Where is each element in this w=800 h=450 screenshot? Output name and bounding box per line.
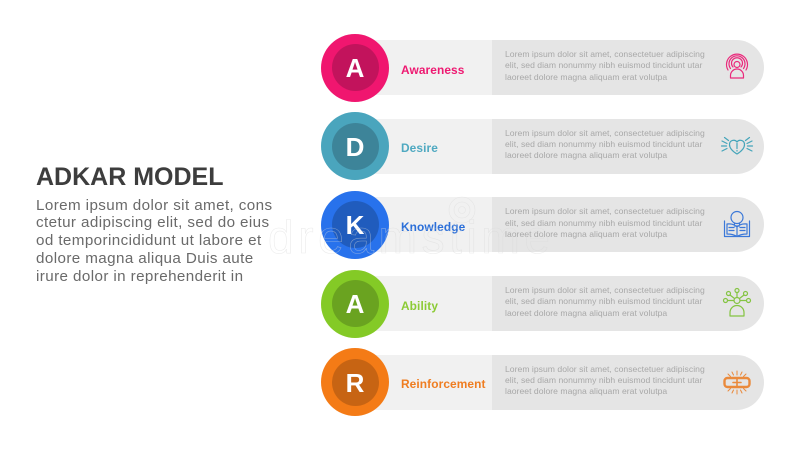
- description: [505, 128, 705, 160]
- description: Lorem ipsum dolor sit amet, consectetuer adipiscing: [505, 285, 705, 295]
- description: elit, sed diam nonummy nibh euismod tincidunt utar: [505, 139, 702, 149]
- description: laoreet dolore magna aliquam erat volutpa: [505, 72, 667, 82]
- description: Lorem ipsum dolor sit amet, consectetuer adipiscing: [505, 364, 705, 374]
- row: Awareness: [321, 34, 764, 102]
- description: elit, sed diam nonummy nibh euismod tincidunt utar: [505, 60, 702, 70]
- description: elit, sed diam nonummy nibh euismod tincidunt utar: [505, 296, 702, 306]
- intro text: ctetur adipiscing elit, sed do eius: [36, 214, 270, 231]
- watermark: dreamstime: [268, 211, 550, 263]
- icon: book with bulb: [724, 210, 750, 238]
- icon: person with skills network: [722, 288, 752, 317]
- description: [505, 364, 705, 396]
- description: [505, 206, 705, 239]
- label: Awareness: Awareness: [401, 62, 464, 76]
- badge: K: K: [346, 210, 364, 240]
- label: Reinforcement: Reinforcement: [401, 377, 486, 391]
- intro text: [36, 196, 272, 285]
- row: Ability: [321, 270, 764, 338]
- badge: D: [321, 112, 389, 180]
- title: ADKAR MODEL: [36, 163, 224, 191]
- badge: A: A: [346, 53, 364, 83]
- icon: reinforced chain link: [723, 370, 751, 394]
- row: Reinforcement: [321, 348, 764, 416]
- intro text: irure dolor in reprehenderit in: [36, 268, 243, 285]
- intro text: Lorem ipsum dolor sit amet, cons: [36, 196, 272, 214]
- badge: A: [321, 270, 389, 338]
- badge: A: A: [346, 289, 364, 319]
- description: elit, sed diam nonummy nibh euismod tincidunt utar: [505, 218, 702, 228]
- label: Ability: Ability: [401, 299, 438, 313]
- icon: broadcasting person: [726, 54, 748, 79]
- row: Knowledge: [321, 191, 764, 259]
- description: Lorem ipsum dolor sit amet, consectetuer adipiscing: [505, 128, 705, 138]
- label: Desire: Desire: [401, 141, 438, 155]
- description: Lorem ipsum dolor sit amet, consectetuer adipiscing: [505, 206, 705, 216]
- description: laoreet dolore magna aliquam erat volutpa: [505, 229, 667, 239]
- description: [505, 49, 705, 82]
- description: [505, 285, 705, 318]
- row: Desire: [321, 112, 764, 180]
- description: laoreet dolore magna aliquam erat volutpa: [505, 308, 667, 318]
- description: Lorem ipsum dolor sit amet, consectetuer adipiscing: [505, 49, 705, 59]
- badge: D: D: [346, 132, 364, 162]
- description: laoreet dolore magna aliquam erat volutpa: [505, 386, 667, 396]
- description: elit, sed diam nonummy nibh euismod tincidunt utar: [505, 375, 702, 385]
- badge: A: [321, 34, 389, 102]
- intro text: dolore magna aliqua Duis aute: [36, 250, 254, 267]
- icon: glowing heart: [720, 136, 754, 155]
- badge: K: [321, 191, 389, 259]
- label: Knowledge: Knowledge: [401, 220, 465, 234]
- badge: R: R: [346, 368, 364, 398]
- intro text: od temporincididunt ut labore et: [36, 232, 262, 249]
- badge: R: [321, 348, 389, 416]
- description: laoreet dolore magna aliquam erat volutpa: [505, 150, 667, 160]
